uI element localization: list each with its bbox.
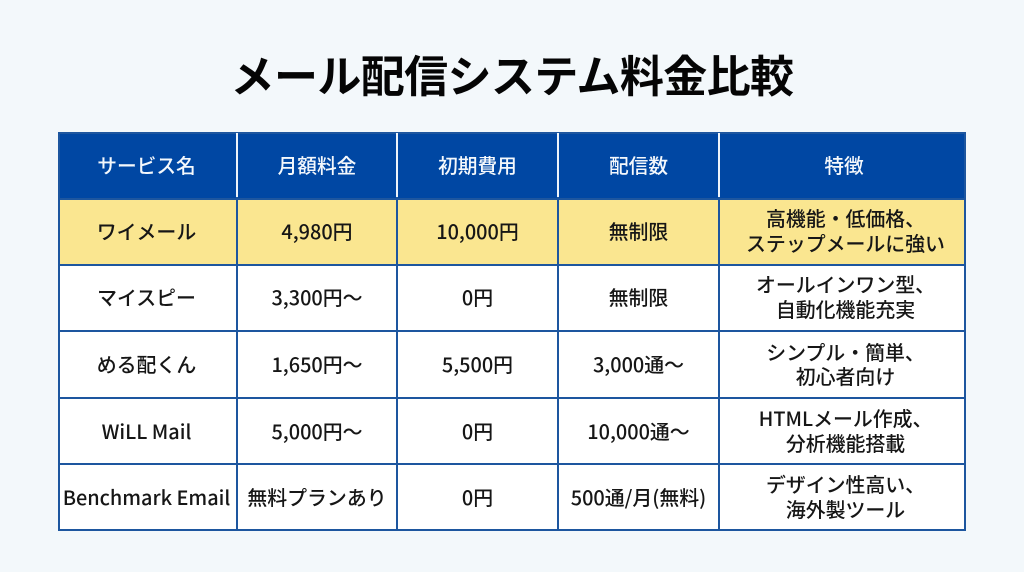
- row 4 initial cost: [398, 399, 557, 463]
- row 2 features: [720, 266, 964, 330]
- row 3 delivery count: 3,000通〜: [593, 349, 684, 378]
- row 5 initial cost: [398, 465, 557, 529]
- header: initial cost: 初期費用: [438, 150, 517, 179]
- row 1 delivery count: [559, 200, 718, 264]
- row 1 features: [720, 200, 964, 264]
- header: features: [720, 134, 964, 198]
- row 5 features: デザイン性高い、: [766, 469, 925, 498]
- row 2 delivery count: [559, 266, 718, 330]
- row 4 delivery count: [559, 399, 718, 463]
- row 4 service: [60, 399, 236, 463]
- row 3 features: [720, 332, 964, 397]
- row 1 monthly fee: 4,980円: [281, 216, 353, 245]
- row 5 delivery count: [559, 465, 718, 529]
- row 3 monthly fee: 1,650円〜: [271, 349, 363, 378]
- title: メール配信システム料金比較: [231, 41, 793, 105]
- row 5 monthly fee: 無料プランあり: [247, 482, 387, 511]
- row 5 features: 海外製ツール: [786, 494, 905, 522]
- row 3 features: 初心者向け: [796, 361, 895, 390]
- row 4 delivery count: 10,000通〜: [587, 416, 690, 445]
- row 1 initial cost: 10,000円: [436, 216, 519, 245]
- row 2 monthly fee: 3,300円〜: [271, 282, 363, 311]
- header: delivery count: 配信数: [609, 150, 668, 179]
- row 1 initial cost: [398, 200, 557, 264]
- row 2 initial cost: 0円: [462, 282, 493, 311]
- header: delivery count: [559, 134, 718, 198]
- row 5 service: Benchmark Email: [63, 482, 230, 511]
- row 1 delivery count: 無制限: [609, 216, 668, 245]
- header: service name: サービス名: [97, 150, 196, 179]
- row 2 monthly fee: [238, 266, 396, 330]
- row 4 features: 分析機能搭載: [786, 428, 905, 456]
- row 3 service: める配くん: [97, 349, 196, 378]
- row 1 features: 高機能・低価格、: [766, 203, 925, 232]
- row 2 features: 自動化機能充実: [776, 294, 915, 322]
- row 5 monthly fee: [238, 465, 396, 529]
- row 3 initial cost: [398, 332, 557, 397]
- row 4 features: [720, 399, 964, 463]
- row 3 initial cost: 5,500円: [442, 349, 513, 378]
- header: service name: [60, 134, 236, 198]
- comparison table: [58, 132, 966, 531]
- row 3 features: シンプル・簡単、: [766, 336, 925, 366]
- row 2 features: オールインワン型、: [756, 269, 935, 298]
- row 4 monthly fee: [238, 399, 396, 463]
- header: initial cost: [398, 134, 557, 198]
- row 5 initial cost: 0円: [462, 482, 493, 511]
- header: features: 特徴: [824, 150, 864, 179]
- row 2 service: [60, 266, 236, 330]
- row 1 monthly fee: [238, 200, 396, 264]
- row 4 monthly fee: 5,000円〜: [271, 416, 363, 445]
- row 5 delivery count: 500通/月(無料): [571, 482, 706, 511]
- row 3 service: [60, 332, 236, 397]
- header: monthly fee: [238, 134, 396, 198]
- row 1 features: ステップメールに強い: [746, 228, 945, 256]
- row 1 service: highlighted: [60, 200, 236, 264]
- row 4 initial cost: 0円: [462, 416, 493, 445]
- row 3 delivery count: [559, 332, 718, 397]
- header: monthly fee: 月額料金: [278, 150, 356, 179]
- row 5 features: [720, 465, 964, 529]
- row 4 service: WiLL Mail: [102, 416, 191, 445]
- row 1 service: highlighted: ワイメール: [97, 216, 196, 245]
- row 5 service: [60, 465, 236, 529]
- row 3 monthly fee: [238, 332, 396, 397]
- row 2 service: マイスピー: [97, 282, 196, 311]
- row 2 delivery count: 無制限: [609, 282, 668, 311]
- row 2 initial cost: [398, 266, 557, 330]
- row 4 features: HTMLメール作成、: [759, 403, 932, 432]
